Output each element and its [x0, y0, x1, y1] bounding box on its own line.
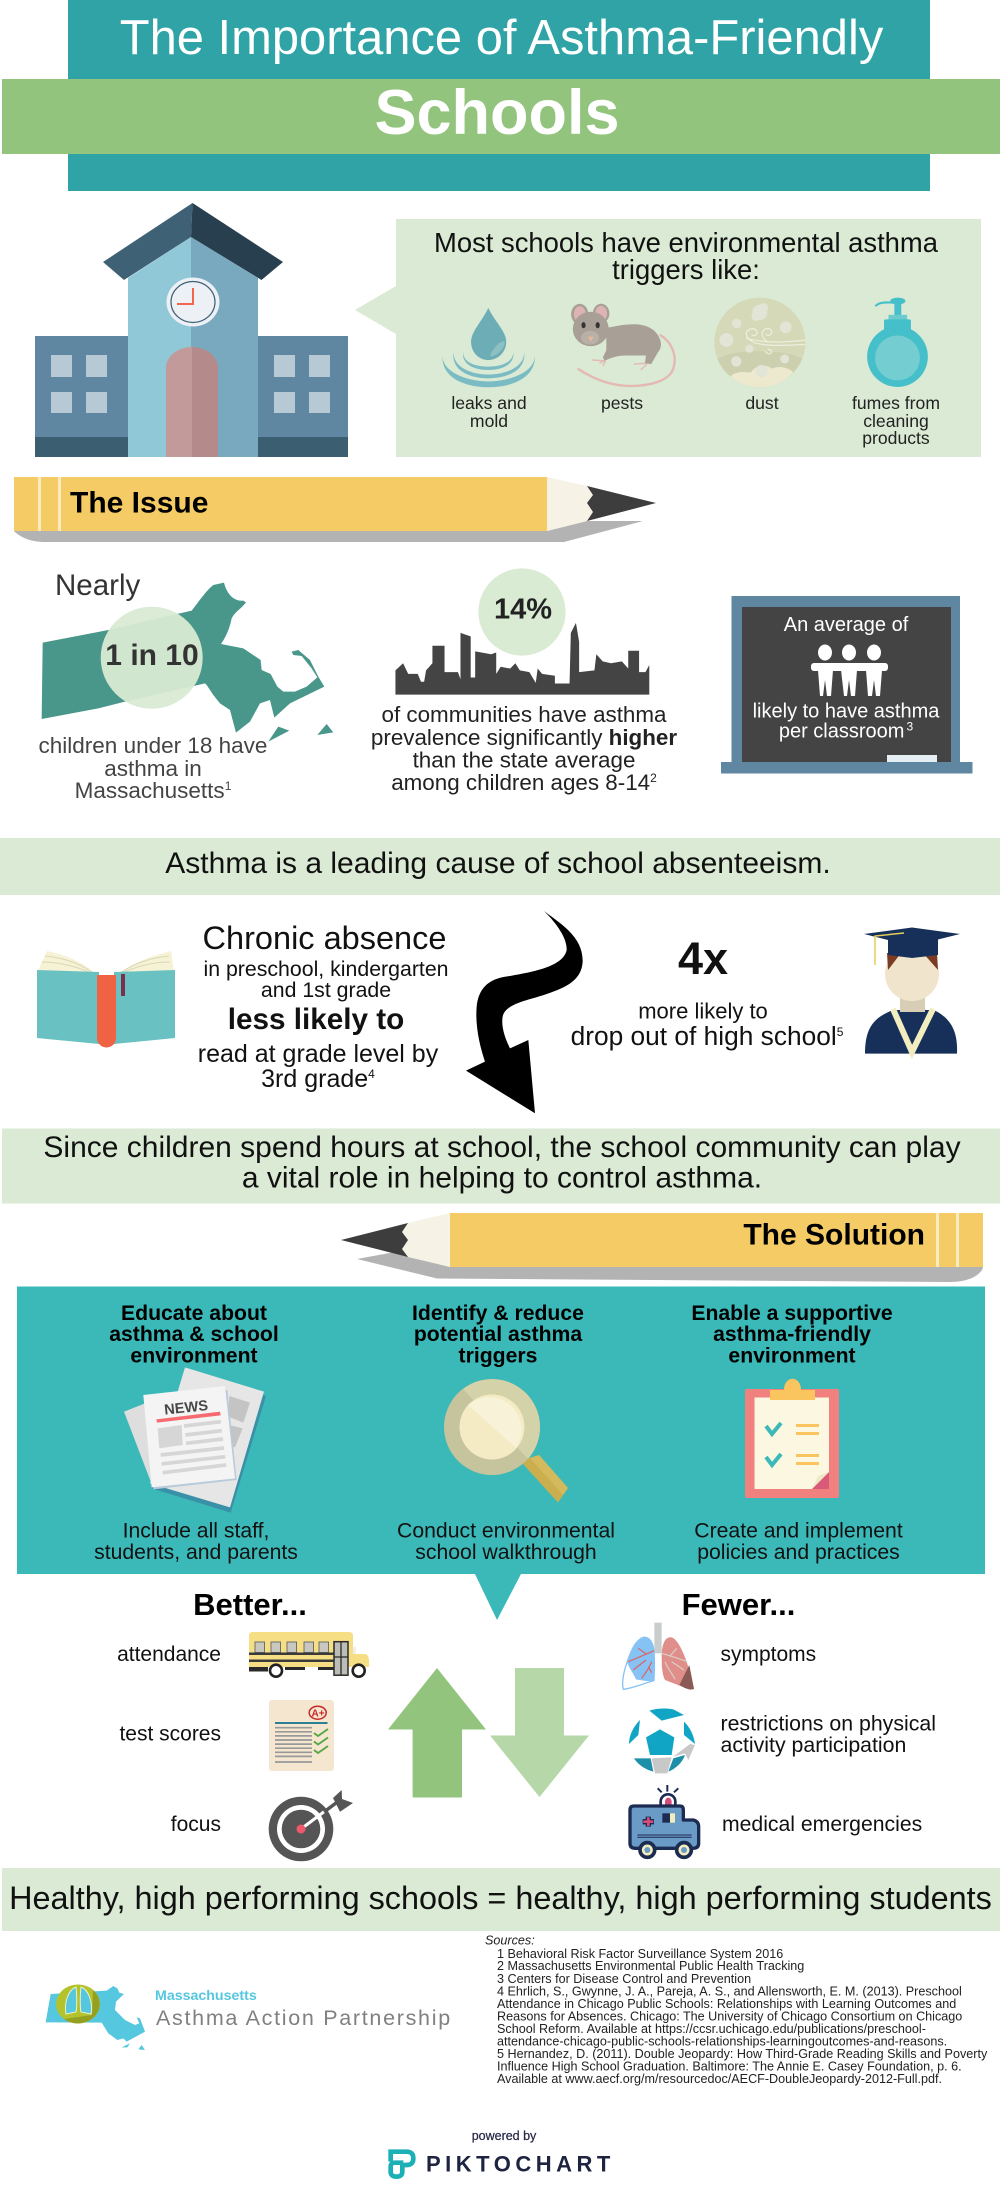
- trigger label: fumes: cleaning: [863, 411, 929, 431]
- trigger label: fumes: fumes from: [852, 393, 940, 413]
- icon: magnifying glass: [444, 1379, 568, 1502]
- panel: solution strategies: [17, 1286, 985, 1620]
- text block: chronic absence: 3rd grade: [261, 1065, 375, 1093]
- footer: powered by Piktochart: powered by: [472, 2129, 537, 2143]
- sources list: 4 Ehrlich, S., Gwynne, J. A., Pareja, A. S., and Allensworth, E. M. (2013). Preschool: [497, 1984, 962, 1998]
- sources list: [485, 1934, 988, 2086]
- banner: conclusion: Healthy, high performing schools = healthy, high performing students: [9, 1880, 992, 1916]
- banner: conclusion: [2, 1868, 1000, 1931]
- title line 1: The Importance of Asthma-Friendly: [120, 11, 884, 65]
- footer: powered by Piktochart: [391, 2129, 615, 2177]
- title line 2: Schools: [374, 78, 620, 148]
- icon: mouse: [571, 304, 675, 386]
- The Solution label: The Solution: [743, 1218, 925, 1252]
- sources list: 2 Massachusetts Environmental Public Health Tracking: [497, 1959, 804, 1973]
- sources list: Attendance in Chicago Public Schools: Relationships with Learning Outcomes and: [497, 1997, 956, 2011]
- column caption: conduct: school walkthrough: [415, 1541, 597, 1564]
- label: test scores: test scores: [119, 1722, 221, 1746]
- heading: The Issue pencil: [14, 477, 656, 542]
- text block: chronic absence: in preschool, kindergarten: [203, 957, 449, 981]
- icon: ambulance: [630, 1785, 699, 1857]
- stat caption: children under 18 have: [39, 733, 267, 758]
- icon: water drop: [442, 308, 535, 387]
- sources list: 5 Hernandez, D. (2011). Double Jeopardy: How Third-Grade Reading Skills and Poverty: [497, 2047, 988, 2061]
- circle with 1 in 10: 1 in 10: [105, 639, 199, 672]
- sources list: Reasons for Absences. Chicago: The University of Chicago Consortium on Chicago: [497, 2010, 962, 2024]
- title banner: [2, 0, 1000, 191]
- panel: asthma triggers callout: [355, 219, 981, 457]
- label: symptoms: symptoms: [720, 1643, 816, 1666]
- sources list: School Reform. Available at https://ccsr.uchicago.edu/publications/preschool-: [497, 2022, 926, 2036]
- chalkboard text bottom: likely to have asthma: [753, 700, 940, 722]
- icon: dust: [714, 298, 806, 387]
- text block: 4x dropout: 4x: [678, 933, 728, 984]
- text block: chronic absence: Chronic absence: [203, 920, 446, 956]
- triggers heading: triggers like:: [612, 254, 760, 285]
- column heading: educate: Educate about: [121, 1302, 267, 1325]
- icon: clipboard: [745, 1379, 839, 1498]
- column heading: enable: environment: [728, 1344, 856, 1368]
- footer: powered by Piktochart: PIKTOCHART: [426, 2152, 615, 2177]
- banner: school community: a vital role in helping to control asthma.: [242, 1162, 762, 1194]
- column caption: conduct: Conduct environmental: [397, 1520, 615, 1542]
- column caption: create: policies and practices: [697, 1541, 900, 1564]
- label: focus: focus: [171, 1813, 221, 1836]
- icon: school building: [35, 203, 348, 457]
- stat caption: Massachusetts: [75, 778, 232, 803]
- stat caption: 2: [650, 771, 657, 785]
- icon: graded test: [269, 1700, 334, 1771]
- label: attendance: attendance: [117, 1643, 221, 1666]
- chalkboard text top: An average of: [784, 614, 909, 636]
- icon: lungs: [623, 1623, 694, 1690]
- arrow: curving down: [466, 911, 583, 1113]
- text block: 4x dropout: drop out of high school: [571, 1021, 837, 1051]
- stat caption: 1: [225, 779, 232, 793]
- sources list: 1 Behavioral Risk Factor Surveillance System 2016: [497, 1947, 783, 1961]
- column caption: create: Create and implement: [694, 1520, 903, 1542]
- column caption: include: Include all staff,: [123, 1520, 269, 1542]
- heading: Fewer: Fewer...: [682, 1587, 795, 1622]
- icon: Massachusetts map: [42, 583, 333, 742]
- icon: three children: [811, 644, 888, 696]
- icon: soap bottle: [867, 298, 928, 387]
- stat: 1 in 10 children: [39, 569, 333, 803]
- trigger label: dust: dust: [745, 393, 779, 413]
- stat caption: asthma in: [104, 756, 202, 781]
- column heading: identify: potential asthma: [414, 1323, 582, 1346]
- sources list: Influence High School Graduation. Baltimore: The Annie E. Casey Foundation, p. 6.: [497, 2060, 962, 2074]
- column heading: enable: Enable a supportive: [691, 1302, 893, 1325]
- banner: absenteeism: [0, 838, 1000, 895]
- sources list: Sources:: [485, 1934, 535, 1948]
- text block: 4x dropout: 5: [837, 1025, 844, 1039]
- arrow: down: [490, 1668, 589, 1797]
- icon: graded test: A+: [311, 1708, 325, 1720]
- text block: chronic absence: [198, 920, 449, 1093]
- heading: Better: Better...: [193, 1587, 307, 1622]
- column heading: educate: asthma & school: [109, 1323, 279, 1346]
- trigger label: leaks and mold: leaks and: [451, 393, 527, 413]
- icon: city skyline: [395, 623, 649, 695]
- sources list: 3 Centers for Disease Control and Prevention: [497, 1972, 751, 1986]
- icon: graduate: [864, 928, 960, 1054]
- stat caption: prevalence significantly higher: [371, 725, 677, 750]
- circle with 14%: [478, 568, 566, 656]
- stat caption: among children ages 8-14: [391, 770, 657, 795]
- label: restrictions: activity participation: [720, 1733, 906, 1757]
- Nearly label: Nearly: [55, 569, 140, 602]
- icon: school bus: [249, 1632, 369, 1677]
- text block: chronic absence: less likely to: [228, 1003, 404, 1036]
- column heading: identify: triggers: [459, 1344, 537, 1368]
- column heading: identify: Identify & reduce: [412, 1302, 584, 1325]
- column heading: educate: environment: [130, 1344, 258, 1368]
- banner: school community: [2, 1128, 1000, 1204]
- heading: The Solution pencil: [341, 1213, 983, 1282]
- text block: chronic absence: and 1st grade: [261, 978, 391, 1002]
- stat caption: of communities have asthma: [382, 702, 667, 727]
- circle with 14%: 14%: [494, 594, 552, 626]
- arrow: up: [388, 1668, 486, 1798]
- text block: chronic absence: read at grade level by: [198, 1040, 439, 1068]
- trigger label: pests: pests: [601, 393, 643, 413]
- chalkboard text bottom: 3: [906, 720, 913, 734]
- banner: absenteeism: Asthma is a leading cause of school absenteeism.: [165, 847, 831, 880]
- label: medical emergencies: medical emergencies: [722, 1813, 922, 1836]
- icon: open book: [37, 951, 175, 1048]
- stat caption: than the state average: [413, 748, 635, 772]
- banner: school community: Since children spend hours at school, the school community can play: [43, 1131, 961, 1164]
- text block: 4x dropout: more likely to: [638, 998, 768, 1024]
- stat: chalkboard classroom: [721, 596, 972, 774]
- label: restrictions: restrictions on physical: [720, 1712, 936, 1736]
- circle with 1 in 10: [101, 607, 203, 709]
- trigger label: fumes: products: [862, 428, 930, 448]
- text block: chronic absence: 4: [368, 1067, 375, 1081]
- chalkboard text bottom: per classroom: [779, 720, 913, 742]
- icon: newspapers: NEWS: [163, 1398, 209, 1419]
- text block: 4x dropout: [571, 933, 844, 1051]
- logo: Massachusetts Asthma Action Partnership: Asthma Action Partnership: [156, 2006, 452, 2030]
- trigger label: leaks and mold: mold: [470, 411, 508, 431]
- triggers heading: Most schools have environmental asthma: [434, 227, 939, 258]
- icon: newspapers: [124, 1367, 266, 1513]
- column heading: enable: asthma-friendly: [713, 1323, 871, 1346]
- sources list: attendance-chicago-public-schools-relationships-learningoutcomes-and-reasons.: [497, 2034, 947, 2048]
- icon: soccer ball: [629, 1708, 695, 1774]
- sources list: Available at www.aecf.org/m/resourcedoc/AECF-DoubleJeopardy-2012-Full.pdf.: [497, 2072, 942, 2086]
- stat: 14% of communities: [371, 568, 677, 795]
- column caption: include: students, and parents: [94, 1541, 298, 1564]
- logo: Massachusetts Asthma Action Partnership: [46, 1984, 452, 2050]
- The Issue label: The Issue: [70, 486, 208, 520]
- icon: target with dart: [269, 1790, 353, 1861]
- icon: Piktochart logo: [391, 2152, 413, 2177]
- logo: Massachusetts Asthma Action Partnership: Massachusetts: [155, 1988, 257, 2004]
